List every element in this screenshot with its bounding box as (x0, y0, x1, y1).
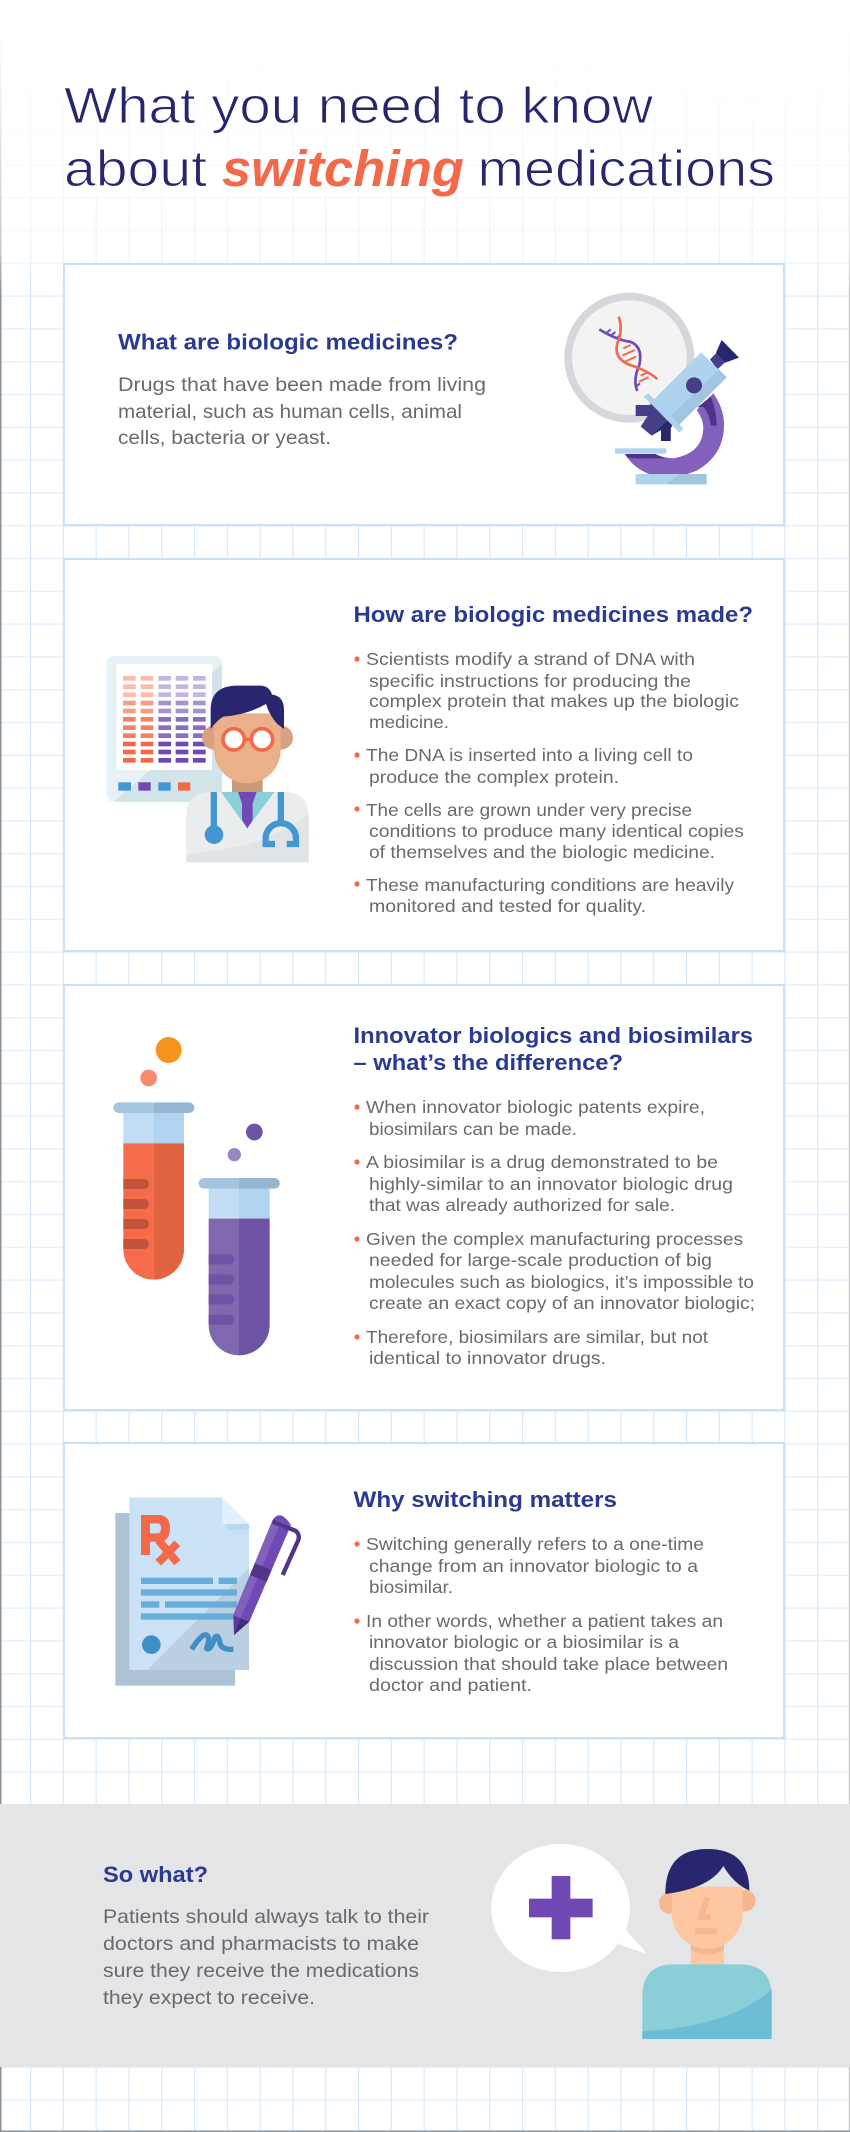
bullet list: why switching matters: doctor and patient. (369, 1675, 532, 1695)
bullet list: how biologics are made: Scientists modify a strand of DNA with (366, 649, 695, 669)
bullet list: difference between biologics and biosimilars: create an exact copy of an innovator biologic; (369, 1293, 755, 1313)
heading: so what: So what? (103, 1862, 208, 1887)
bullet list: difference between biologics and biosimilars: highly-similar to an innovator biologic drug (369, 1174, 733, 1194)
heading: why switching matters: Why switching matters (354, 1487, 617, 1512)
panel: innovator biologics and biosimilars (64, 985, 784, 1410)
icon: patient with speech bubble (491, 1844, 772, 2039)
bullet list: why switching matters: change from an innovator biologic to a (369, 1556, 698, 1576)
bullet list: difference between biologics and biosimilars: molecules such as biologics, it’s impossible to (369, 1272, 754, 1292)
bullet list: how biologics are made: medicine. (369, 712, 449, 732)
bullet list: why switching matters: biosimilar. (369, 1577, 453, 1597)
text: biologic definition (118, 374, 486, 449)
title (64, 77, 775, 197)
bullet list: difference between biologics and biosimilars: A biosimilar is a drug demonstrated to be (366, 1152, 718, 1172)
heading: innovator biologics and biosimilars: – what’s the difference? (354, 1050, 623, 1075)
bullet list: how biologics are made: produce the complex protein. (369, 767, 619, 787)
icon: doctor with chart (107, 656, 309, 862)
bullet list: difference between biologics and biosimilars: biosimilars can be made. (369, 1119, 577, 1139)
bullet list: difference between biologics and biosimilars: identical to innovator drugs. (369, 1348, 606, 1368)
bullet list: how biologics are made: specific instructions for producing the (369, 671, 691, 691)
bullet list: why switching matters: Switching generally refers to a one-time (366, 1534, 704, 1554)
text: talk to doctors: sure they receive the medications (103, 1960, 419, 1982)
heading: what are biologic medicines: What are biologic medicines? (118, 330, 458, 354)
text: talk to doctors: they expect to receive. (103, 1987, 315, 2009)
bullet list: how biologics are made: These manufacturing conditions are heavily (366, 875, 734, 895)
bullet list: how biologics are made: monitored and tested for quality. (369, 896, 646, 916)
bullet list: why switching matters (354, 1534, 728, 1695)
bullet list: why switching matters: innovator biologic or a biosimilar is a (369, 1632, 679, 1652)
icon: test tubes (113, 1037, 280, 1355)
text: talk to doctors: Patients should always talk to their (103, 1906, 430, 1928)
bullet list: why switching matters: discussion that should take place between (369, 1654, 728, 1674)
heading: innovator biologics and biosimilars: Innovator biologics and biosimilars (354, 1023, 753, 1048)
bullet list: difference between biologics and biosimilars: that was already authorized for sale. (369, 1195, 675, 1215)
text: biologic definition: material, such as human cells, animal (118, 401, 462, 423)
text: biologic definition: Drugs that have been made from living (118, 374, 486, 396)
bullet list: why switching matters: In other words, whether a patient takes an (366, 1611, 723, 1631)
bullet list: how biologics are made: complex protein that makes up the biologic (369, 691, 739, 711)
panel: how are biologic medicines made (64, 559, 784, 951)
heading: how are biologic medicines made: How are biologic medicines made? (354, 602, 753, 627)
bullet list: difference between biologics and biosimilars: needed for large-scale production of big (369, 1250, 712, 1270)
bullet list: how biologics are made (354, 649, 744, 916)
bullet list: how biologics are made: The cells are grown under very precise (366, 800, 692, 820)
panel: so what band (0, 1804, 850, 2067)
title: What you need to know (64, 77, 653, 134)
bullet list: difference between biologics and biosimilars: Given the complex manufacturing processes (366, 1229, 743, 1249)
bullet list: how biologics are made: conditions to produce many identical copies (369, 821, 744, 841)
bullet list: difference between biologics and biosimilars: When innovator biologic patents expire, (366, 1097, 705, 1117)
bullet list: difference between biologics and biosimilars: Therefore, biosimilars are similar, but not (366, 1327, 708, 1347)
title: about (64, 140, 207, 197)
title: medications (478, 140, 775, 197)
title: switching (222, 140, 464, 197)
panel: why switching matters (64, 1443, 784, 1738)
bullet list: difference between biologics and biosimilars (354, 1097, 755, 1368)
text: talk to doctors: doctors and pharmacists to make (103, 1933, 419, 1955)
bullet list: how biologics are made: The DNA is inserted into a living cell to (366, 745, 693, 765)
text: biologic definition: cells, bacteria or yeast. (118, 427, 331, 449)
heading: innovator biologics and biosimilars (354, 1023, 753, 1075)
icon: microscope with DNA (564, 293, 739, 484)
panel: what are biologic medicines (64, 264, 784, 525)
bullet list: how biologics are made: of themselves and the biologic medicine. (369, 842, 715, 862)
text: talk to doctors (103, 1906, 430, 2009)
icon: prescription and pen (115, 1497, 299, 1686)
